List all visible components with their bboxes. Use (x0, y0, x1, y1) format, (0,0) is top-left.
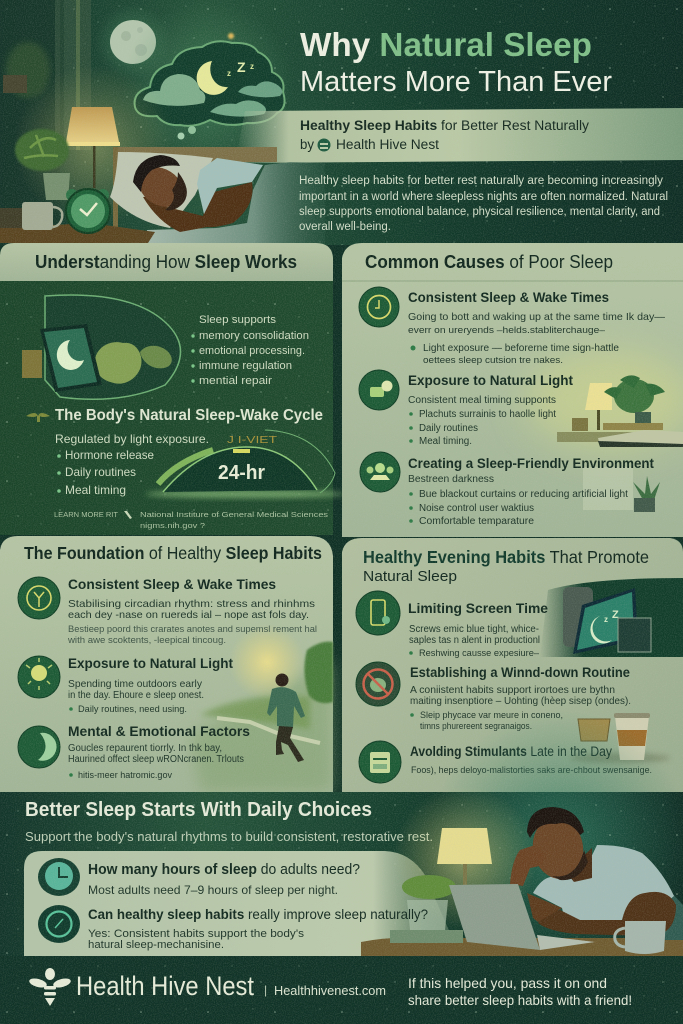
subtitle band: by (300, 137, 314, 152)
icon: light bulb (359, 370, 399, 410)
item: consistent sleep and wake times: Consistent Sleep & Wake Times (68, 577, 276, 592)
item: wind-down routine: timns phurereent segranaigos. (420, 721, 532, 732)
brand name: Health Hive Nest (76, 971, 254, 1001)
item: exposure to natural light: Spending time outdoors early (68, 678, 203, 690)
item: exposure to natural light: Exposure to Natural Light (408, 373, 574, 388)
icon: sun (18, 656, 60, 698)
item: sleep-friendly environment: Comfortable temparature (419, 516, 534, 527)
brand name (76, 971, 386, 1001)
item: avoiding stimulants: Foos), heps deloyo-malistorties saks are-chbout swensanige. (411, 765, 652, 776)
item: exposure to natural light: Daily routines (419, 423, 478, 434)
back shadow (640, 880, 683, 940)
item: consistent sleep and wake times: each dey -nase on ruereds ial – nope ast fols day. (68, 609, 309, 621)
FAQ item: hours of sleep: Most adults need 7–9 hours of sleep per night. (88, 883, 338, 897)
list: sleep supports (191, 314, 309, 387)
item: mental and emotional factors: Goucles repaurent tiorrly. In thk bay, (68, 743, 222, 754)
item: consistent sleep and wake times: everr on ureɾyends –helds.stabliterchauge– (408, 325, 606, 336)
illustration: dream cloud with crescent moon: Z (237, 59, 246, 75)
item: mental and emotional factors: Haurined offect sleep wRONcranen. Trlouts (68, 754, 244, 765)
item: avoiding stimulants (359, 741, 652, 783)
laptop (449, 884, 540, 950)
icon: green alarm clock (66, 189, 110, 233)
item: exposure to natural light (359, 370, 574, 447)
item: limiting screen time (356, 591, 548, 659)
title: Matters More Than Ever (300, 66, 612, 98)
list: sleep supports: Sleep supports (199, 314, 277, 326)
icon: teal gauge (38, 905, 80, 943)
subtitle band: Health Hive Nest (336, 137, 439, 152)
list: sleep supports: immune regulation (199, 360, 292, 372)
icon: label box (359, 741, 401, 783)
panel: the foundation of healthy sleep habits (0, 536, 333, 792)
item: consistent sleep and wake times: oettees sleep cutsion tre nakes. (423, 355, 563, 366)
source note: LEARN MORE RIT (54, 510, 118, 519)
beard (552, 850, 588, 880)
list: regulated by (55, 432, 209, 497)
call to action: If this helped you, pass it on ond (408, 975, 607, 991)
figure: running man (267, 674, 305, 762)
hair (527, 807, 584, 838)
illustration: phone and brain in dream bubble (22, 295, 180, 399)
subtitle band: Healthy Sleep Habits for Better Rest Naturally (300, 118, 589, 133)
icon: prohibited sign (356, 662, 400, 706)
icon: full moon (95, 4, 171, 80)
logo: bee (28, 968, 72, 1006)
illustration: bedroom curtain and wall plant (0, 0, 91, 245)
item: consistent sleep and wake times: Stabilising circadian rhythm: stress and rhinhms (68, 598, 315, 610)
list: sleep supports: emotional processing. (199, 345, 305, 357)
item: exposure to natural light (18, 656, 234, 715)
source note (54, 510, 328, 530)
far arm and hand (538, 892, 676, 936)
illustration: bedside lamp (14, 65, 174, 225)
raised arm (510, 845, 546, 886)
item: sleep-friendly environment (360, 452, 654, 527)
panel: better sleep starts with daily choices (0, 710, 683, 970)
item: limiting screen time: Reshwing causse expesiure– (419, 648, 540, 659)
illustration: lamp on desk (393, 786, 537, 930)
item: consistent sleep and wake times: with awe scoktents, -leepical tincoug. (67, 635, 226, 645)
brand name: Healthhivenest.com (274, 983, 386, 998)
subheading: Support the body's natural rhythms to build consistent, restorative rest. (25, 829, 433, 844)
title (300, 26, 612, 98)
footer (0, 956, 683, 1024)
illustration: worried man at laptop (361, 807, 683, 956)
item: limiting screen time: saples tas n alent in productionl (409, 635, 540, 646)
beard (165, 172, 187, 210)
FAQ item: hours of sleep (38, 858, 360, 897)
near upper arm (527, 893, 562, 922)
item: consistent sleep and wake times: Consistent Sleep & Wake Times (408, 290, 609, 305)
upper arm and forearm (143, 182, 253, 232)
source note: National Institure of General Medical Sciences (140, 510, 328, 519)
item: sleep-friendly environment: Creating a Sleep-Friendly Environment (408, 456, 654, 471)
item: mental and emotional factors (18, 724, 250, 781)
list: sleep supports: memory consolidation (199, 330, 309, 342)
item: exposure to natural light: Plachuts surrainis to haolle light (419, 409, 556, 420)
item: exposure to natural light: Exposure to Natural Light (68, 656, 234, 671)
illustration: tablet with moon: Z (612, 609, 619, 621)
pillow (110, 152, 213, 228)
item: limiting screen time: Screws emic blue tight, whice- (409, 624, 539, 635)
heading: Better Sleep Starts With Daily Choices (25, 799, 372, 821)
panel: understanding how sleep works (0, 243, 345, 535)
source note: nigms.nih.gov ? (140, 521, 205, 530)
item: consistent sleep and wake times: Going to bott and waking up at the same time Ik day— (408, 311, 665, 323)
item: mental and emotional factors: Mental & Emotional Factors (68, 724, 250, 739)
subheading: sleep-wake cycle: The Body's Natural Sleep-Wake Cycle (55, 407, 323, 424)
illustration: potted plant (15, 129, 70, 200)
list: regulated by: Regulated by light exposure. (55, 432, 209, 446)
item: wind-down routine: Establishing a Winnd-down Routine (410, 665, 630, 680)
item: consistent sleep and wake times: Bestieep poord this crarates anotes and supemsl rement hal (68, 624, 317, 634)
item: consistent sleep and wake times (359, 287, 665, 366)
item: sleep-friendly environment: Noise control user waktius (419, 503, 534, 514)
item: exposure to natural light: Consistent meal timing supponts (408, 395, 556, 406)
blanket (147, 162, 325, 243)
item: avoiding stimulants: Avolding Stimulants Late in the Day (410, 744, 612, 759)
panel: hero header (0, 0, 683, 245)
subtitle band (235, 108, 683, 163)
item: wind-down routine: Sleip phycace var meure in coneno, (420, 710, 563, 721)
chart: 24-hour arc: 24-hr (218, 462, 265, 484)
list: regulated by: Meal timing (65, 483, 126, 497)
FAQ item: healthy habits: Can healthy sleep habits really improve sleep naturally? (88, 906, 428, 922)
intro paragraph (299, 175, 668, 233)
icon: phone (356, 591, 400, 635)
intro paragraph: important in a world where sleepless nights are often normalized. Natural (299, 191, 668, 203)
item: limiting screen time: Limiting Screen Time (408, 601, 548, 616)
heading: Understanding How Sleep Works (35, 251, 297, 272)
heading: The Foundation of Healthy Sleep Habits (24, 543, 322, 563)
panel: common causes of poor sleep (342, 243, 683, 537)
list: regulated by: Hormone release (65, 448, 154, 462)
item: wind-down routine: maiting insenptiore – Uohting (hèep sisep (ondes). (410, 696, 631, 707)
item: wind-down routine: A coniistent habits support irortoes ure bythn (410, 685, 615, 696)
call to action: share better sleep habits with a friend! (408, 992, 632, 1008)
intro paragraph: Healthy sleep habits for better rest naturally are becoming increasingly (299, 175, 663, 187)
item: exposure to natural light: Daily routines, need using. (78, 704, 187, 715)
mug (625, 921, 666, 954)
item: consistent sleep and wake times: Light exposure — beforerne time sign-hattle (423, 343, 619, 354)
item: exposure to natural light: Meal timing. (419, 436, 472, 447)
FAQ item: healthy habits: hatural sleep-mechanisine. (88, 939, 224, 951)
heading (363, 547, 649, 585)
call to action (408, 975, 632, 1008)
icon: stylised clock (18, 577, 60, 619)
illustration: nightstand with mug (0, 202, 155, 243)
chart: 24-hour arc: J I-VIET (227, 435, 277, 446)
FAQ card (24, 851, 460, 956)
FAQ item: healthy habits: Yes: Consistent habits support the body's (88, 928, 305, 940)
item: wind-down routine (356, 662, 631, 732)
illustration: runner on green path (190, 624, 333, 792)
title: Why Natural Sleep (300, 26, 592, 63)
head (131, 159, 191, 215)
illustration: coffee cups (570, 713, 670, 763)
item: exposure to natural light: in the day. Ehoure e sleep onest. (68, 689, 204, 701)
hair (133, 155, 180, 192)
illustration: tablet with moon: z (604, 615, 608, 624)
illustration: tablet with moon (540, 578, 683, 657)
illustration: lamp, books and plant (525, 350, 683, 450)
list: regulated by: Daily routines (65, 465, 136, 479)
illustration: aloe plant and curtain (583, 467, 660, 512)
head (528, 813, 588, 883)
intro paragraph: overall well-being. (299, 221, 391, 233)
icon: plant (360, 452, 400, 492)
item: sleep-friendly environment: Bestreen darkness (408, 474, 494, 485)
heading: Natural Sleep (363, 568, 457, 585)
icon: crescent (18, 726, 60, 768)
illustration: dream cloud with crescent moon (123, 0, 293, 170)
brand name: | (264, 983, 267, 997)
torso (533, 845, 674, 925)
illustration: dream cloud with crescent moon: z (250, 62, 254, 71)
plant (402, 875, 456, 930)
heading: Common Causes of Poor Sleep (365, 251, 613, 272)
FAQ item: healthy habits (38, 905, 428, 951)
heading: Healthy Evening Habits That Promote (363, 547, 649, 567)
icon: small bee logo (318, 138, 330, 152)
chart: 24-hour arc (145, 430, 345, 498)
FAQ item: hours of sleep: How many hours of sleep do adults need? (88, 862, 360, 878)
intro paragraph: sleep supports emotional balance, physical resilience, mental clarity, and (299, 206, 660, 218)
illustration: bed with sleeping man (110, 147, 325, 243)
list: sleep supports: mential repair (199, 375, 272, 387)
item: sleep-friendly environment: Bue blackout curtains or reducing artificial light (419, 489, 628, 500)
item: consistent sleep and wake times (18, 577, 317, 645)
item: mental and emotional factors: hitis-meer hatromic.gov (78, 770, 172, 781)
icon: clock (359, 287, 399, 327)
icon: teal clock (38, 858, 80, 896)
text: zzz: z (227, 69, 231, 78)
neck (566, 848, 592, 882)
shirt (197, 158, 263, 214)
panel: healthy evening habits (342, 538, 683, 792)
icon: sprout (26, 413, 50, 422)
